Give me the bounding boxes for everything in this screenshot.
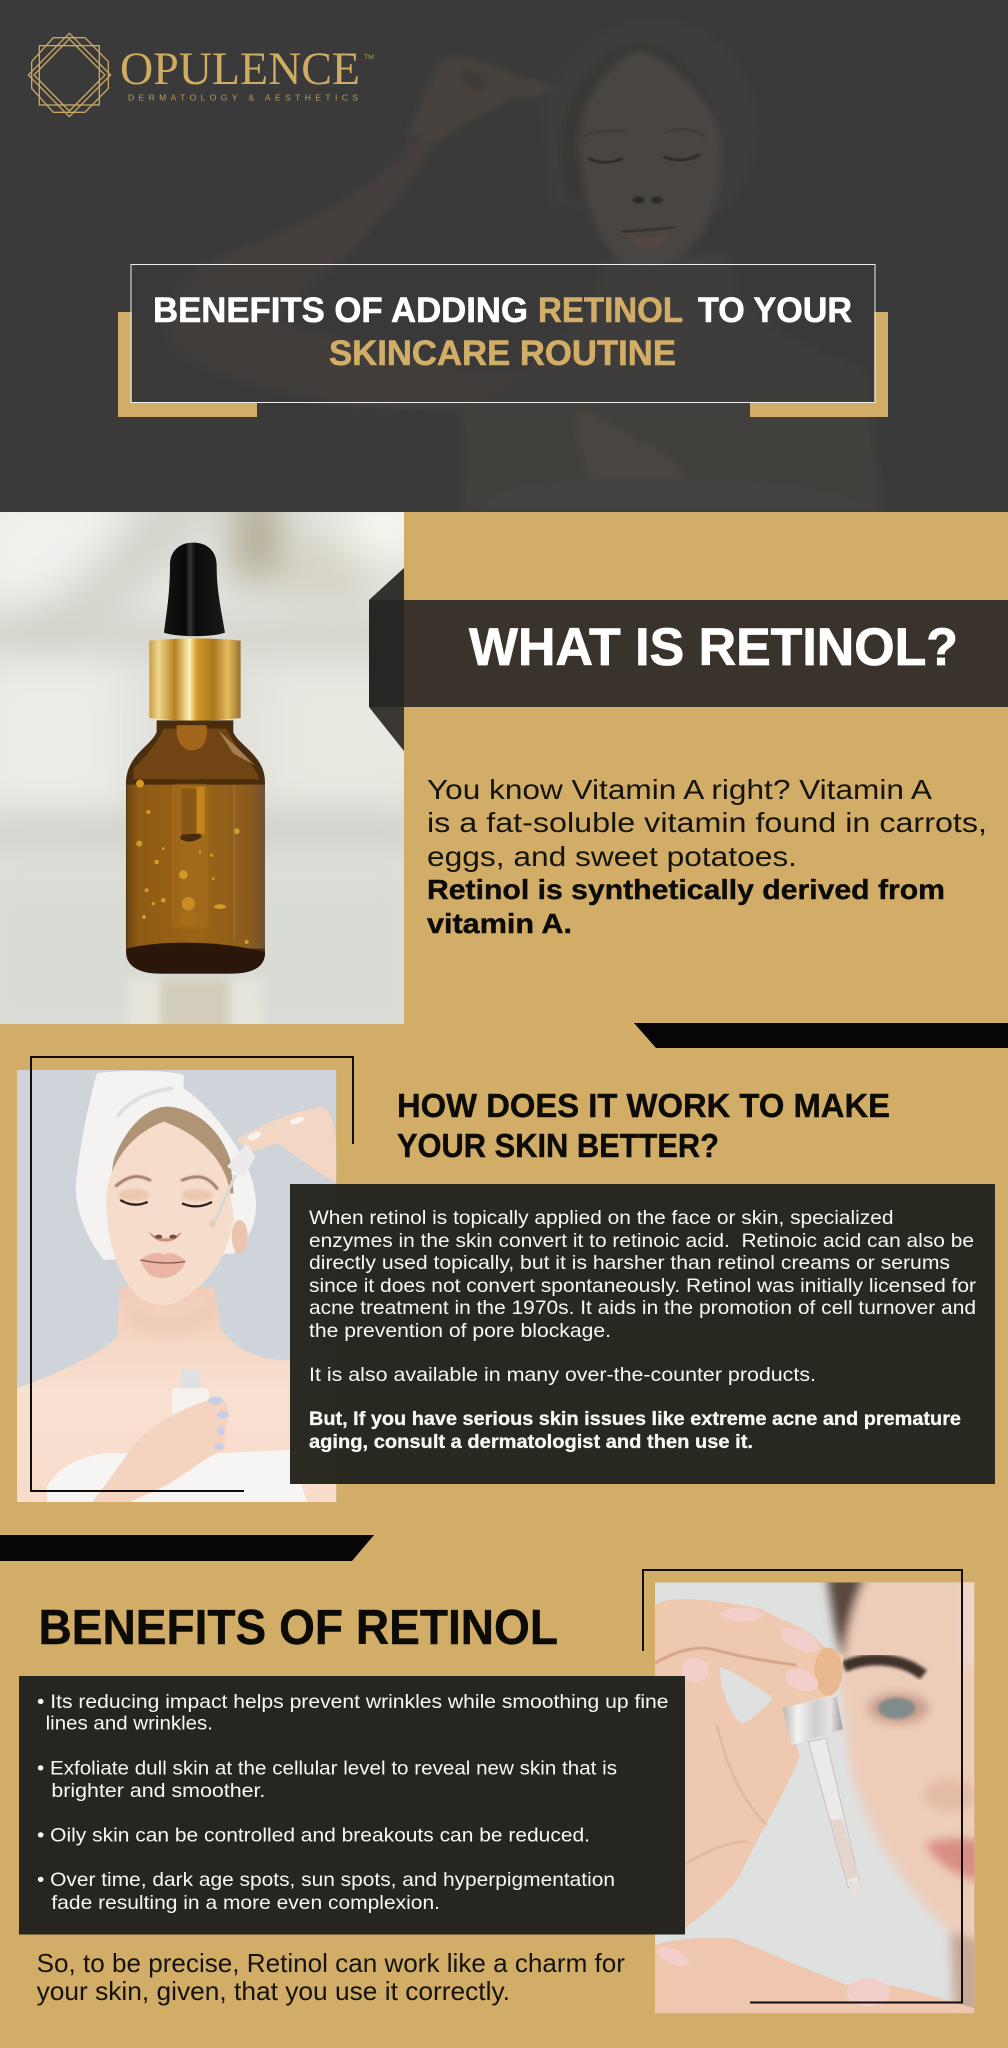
closing statement	[37, 1948, 625, 2006]
body	[17, 1287, 336, 1502]
definition text: vitamin A.	[427, 908, 572, 939]
logo trademark: TM	[364, 55, 374, 61]
photo frame lines	[643, 1570, 962, 2002]
benefits list card: fade resulting in a more even complexion.	[51, 1892, 440, 1914]
explanation card: acne treatment in the 1970s. It aids in the promotion of cell turnover and	[309, 1297, 976, 1319]
upper hand	[655, 1599, 843, 1928]
definition text: Retinol is synthetically derived from	[427, 874, 945, 905]
closing statement: your skin, given, that you use it correctly.	[37, 1976, 510, 2006]
title	[153, 291, 852, 373]
heading: BENEFITS OF RETINOL	[38, 1601, 558, 1655]
divider strip right	[634, 1023, 1008, 1048]
benefits list card: • Oily skin can be controlled and breakouts can be reduced.	[37, 1824, 590, 1846]
dropper	[808, 1738, 860, 1888]
definition text	[427, 774, 987, 939]
title: SKINCARE ROUTINE	[329, 334, 676, 373]
definition text: You know Vitamin A right? Vitamin A	[427, 774, 932, 805]
explanation card: the prevention of pore blockage.	[309, 1320, 611, 1342]
panel: hero header	[0, 0, 1008, 512]
hero faded photo of woman applying serum	[208, 52, 876, 508]
banner side tab	[369, 568, 404, 751]
benefits list card: lines and wrinkles.	[46, 1712, 213, 1734]
lower hand	[655, 1938, 974, 2013]
heading	[397, 1087, 890, 1164]
heading: WHAT IS RETINOL?	[469, 618, 958, 677]
title: TO YOUR	[698, 291, 852, 330]
benefits list card: brighter and smoother.	[51, 1780, 265, 1802]
benefits list card: • Its reducing impact helps prevent wrinkles while smoothing up fine	[37, 1691, 668, 1713]
bottle gold collar	[149, 638, 241, 721]
heading: YOUR SKIN BETTER?	[397, 1127, 719, 1164]
panel: how does it work	[17, 1057, 995, 1502]
hand with bottle	[92, 1397, 229, 1502]
explanation card: aging, consult a dermatologist and then use it.	[309, 1431, 753, 1453]
logo wordmark: OPULENCE	[120, 43, 360, 95]
title frame	[131, 264, 875, 402]
title: BENEFITS OF ADDING	[153, 291, 528, 330]
bottle body	[126, 720, 265, 974]
panel: bottle photo	[0, 512, 404, 1024]
photo: woman holding dropper	[655, 1575, 983, 2022]
logo	[28, 33, 374, 117]
small serum bottle	[182, 1370, 200, 1390]
panel: what is retinol	[369, 568, 1008, 939]
lower towel	[47, 1450, 307, 1502]
explanation card: But, If you have serious skin issues like extreme acne and premature	[309, 1408, 961, 1430]
definition text: is a fat-soluble vitamin found in carrots,	[427, 807, 987, 838]
bottle rubber bulb	[164, 543, 225, 636]
photo frame lines	[31, 1057, 353, 1491]
icon: logo emblem	[28, 33, 111, 117]
photo: woman with towel applying serum	[17, 1070, 336, 1502]
benefits list card: • Over time, dark age spots, sun spots, and hyperpigmentation	[37, 1869, 615, 1891]
logo tagline: DERMATOLOGY & AESTHETICS	[128, 92, 358, 102]
face	[106, 1122, 234, 1305]
explanation card: directly used topically, but it is harsher than retinol creams or serums	[309, 1252, 950, 1274]
explanation card: When retinol is topically applied on the face or skin, specialized	[309, 1207, 894, 1229]
benefits list card: • Exfoliate dull skin at the cellular level to reveal new skin that is	[37, 1758, 617, 1780]
benefits list card	[19, 1676, 685, 1934]
towel on head	[76, 1071, 256, 1260]
explanation card: It is also available in many over-the-counter products.	[309, 1364, 816, 1386]
title gold bracket	[118, 312, 888, 417]
explanation card: since it does not convert spontaneously. Retinol was initially licensed for	[309, 1275, 977, 1297]
closing statement: So, to be precise, Retinol can work like a charm for	[37, 1948, 625, 1978]
blurred face	[827, 1575, 983, 2022]
banner	[404, 600, 1008, 707]
panel: benefits of retinol	[19, 1570, 983, 2022]
raising hand and dropper	[237, 1107, 336, 1182]
title: RETINOL	[538, 291, 683, 330]
definition text: eggs, and sweet potatoes.	[427, 841, 797, 872]
explanation card	[290, 1184, 995, 1484]
divider strip left	[0, 1535, 374, 1561]
heading: HOW DOES IT WORK TO MAKE	[397, 1087, 890, 1124]
bottle reflection	[130, 976, 260, 1024]
explanation card: enzymes in the skin convert it to retinoic acid. Retinoic acid can also be	[309, 1230, 974, 1252]
